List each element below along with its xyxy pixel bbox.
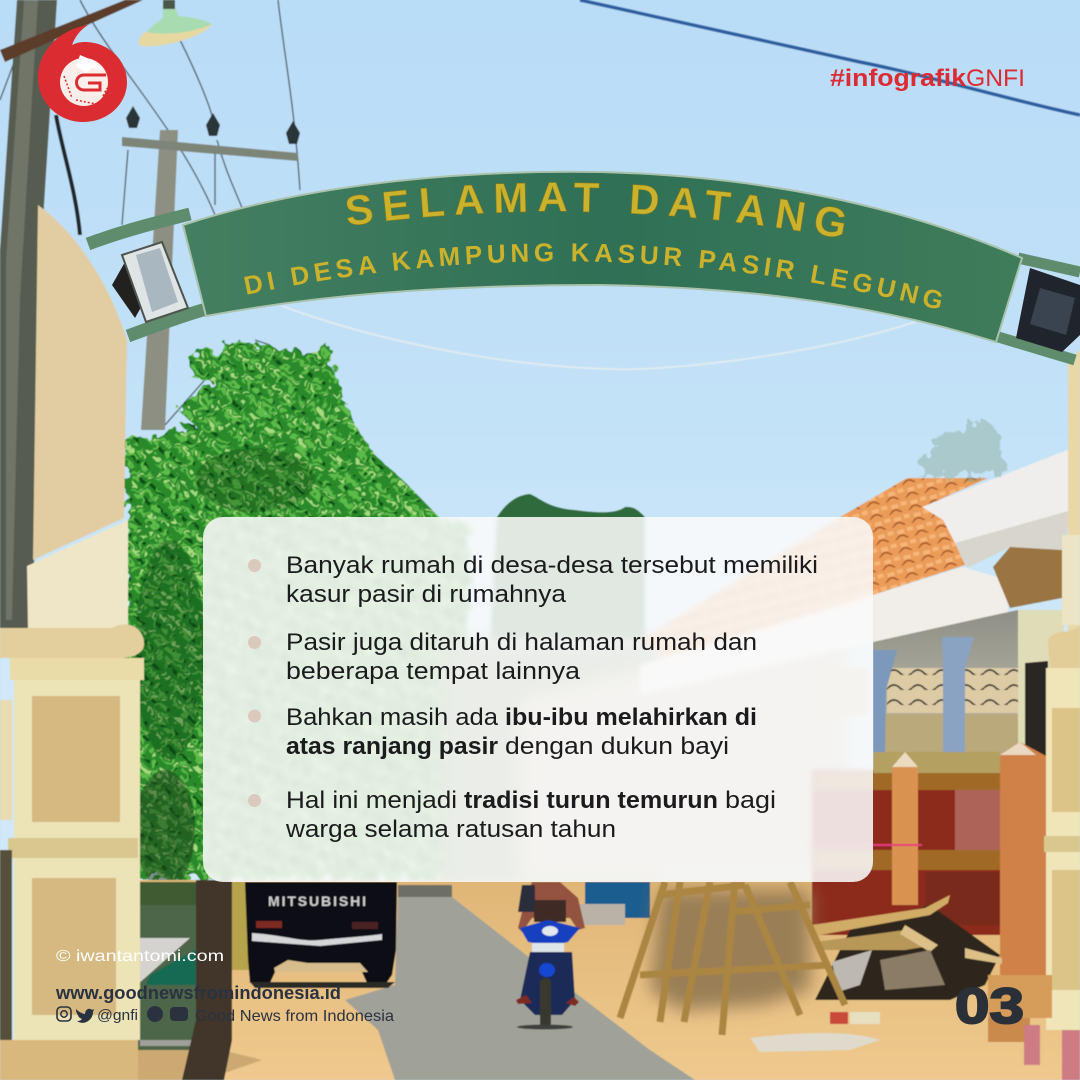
tree trunk [182, 880, 232, 1080]
right gate pillar [988, 350, 1080, 1080]
logo white emblem [60, 55, 108, 106]
wood pile [812, 895, 1002, 1000]
bullet item 1: Banyak rumah di desa-desa tersebut memiliki [286, 552, 818, 579]
litter [750, 1033, 880, 1052]
bullet item 3 [248, 704, 757, 760]
icon: floodlight right [1016, 268, 1080, 352]
blue power cable [580, 0, 1080, 115]
red fence [812, 770, 1010, 935]
bullet item 4 [248, 787, 776, 843]
arch side pipes [88, 214, 1080, 360]
left gate pillar [0, 205, 144, 1080]
truck lettering: MITSUBISHI [268, 893, 366, 909]
columns [873, 650, 897, 760]
wall below eave [873, 610, 1018, 770]
social handle: @gnfi [97, 1007, 138, 1024]
far palms [490, 494, 645, 640]
right wall [1018, 610, 1064, 760]
overhead wires [0, 0, 915, 425]
page number: 03 [955, 978, 1024, 1034]
arch sign board [183, 172, 1022, 342]
motorbike and rider [516, 882, 585, 1030]
social row [57, 1006, 394, 1025]
icon: twitter [76, 1009, 94, 1023]
roadside stalls [585, 882, 650, 918]
bullet item 1 [248, 552, 818, 608]
bamboo scaffolding [620, 882, 845, 1035]
left small shop cart [137, 905, 218, 1050]
ground [130, 880, 1080, 1080]
bullet item 4: Hal ini menjadi [286, 787, 457, 814]
dark soil under scaffold [650, 890, 810, 1010]
arch subheading: DI DESA KAMPUNG KASUR PASIR LEGUNG [244, 243, 942, 308]
brown box [993, 547, 1062, 608]
hashtag title: GNFI [966, 65, 1025, 92]
bullet item 3: atas ranjang pasir [286, 733, 498, 760]
bullet item 4: tradisi turun temurun [464, 787, 718, 814]
right building [640, 448, 1072, 975]
tree [125, 340, 470, 890]
lower eave [640, 567, 1008, 695]
arch heading: SELAMAT DATANG [346, 182, 845, 237]
bullet item 4: bagi [725, 787, 776, 814]
bullet item 2 [248, 629, 757, 685]
utility pole and insulators [122, 106, 300, 430]
gate posts [892, 752, 918, 905]
page name: Good News from Indonesia [195, 1008, 394, 1025]
bullet item 3: ibu-ibu melahirkan di [505, 704, 757, 731]
website url: www.goodnewsfromindonesia.id [55, 983, 341, 1003]
welcome arch [86, 170, 1080, 366]
icon: floodlight left [112, 242, 188, 322]
upper eave [922, 448, 1072, 543]
logo GNFI [38, 25, 127, 122]
icon: facebook [147, 1006, 163, 1022]
street lamp shade [139, 0, 212, 46]
left concrete pole [0, 0, 57, 640]
bullet item 2: Pasir juga ditaruh di halaman rumah dan [286, 629, 757, 656]
panel: text card [203, 517, 873, 882]
bullet item 2: beberapa tempat lainnya [286, 658, 581, 685]
background tile [887, 668, 1020, 713]
photo credit: © iwantantomi.com [56, 948, 224, 965]
icon: instagram [57, 1007, 71, 1021]
mid street behind card (soft) [440, 620, 850, 890]
tree above roof [918, 421, 1002, 476]
bullet item 1: kasur pasir di rumahnya [286, 581, 567, 608]
icon: youtube [170, 1007, 188, 1021]
bullet item 3: dengan dukun bayi [505, 733, 729, 760]
brown crossbeam [0, 0, 143, 62]
road [345, 897, 695, 1080]
bullet item 3: Bahkan masih ada [286, 704, 499, 731]
logo red swirl [38, 25, 127, 122]
bullet item 4: warga selama ratusan tahun [285, 816, 616, 843]
hashtag title: #infografik [830, 65, 967, 92]
pickup truck [245, 882, 397, 988]
tile roof [640, 478, 988, 680]
